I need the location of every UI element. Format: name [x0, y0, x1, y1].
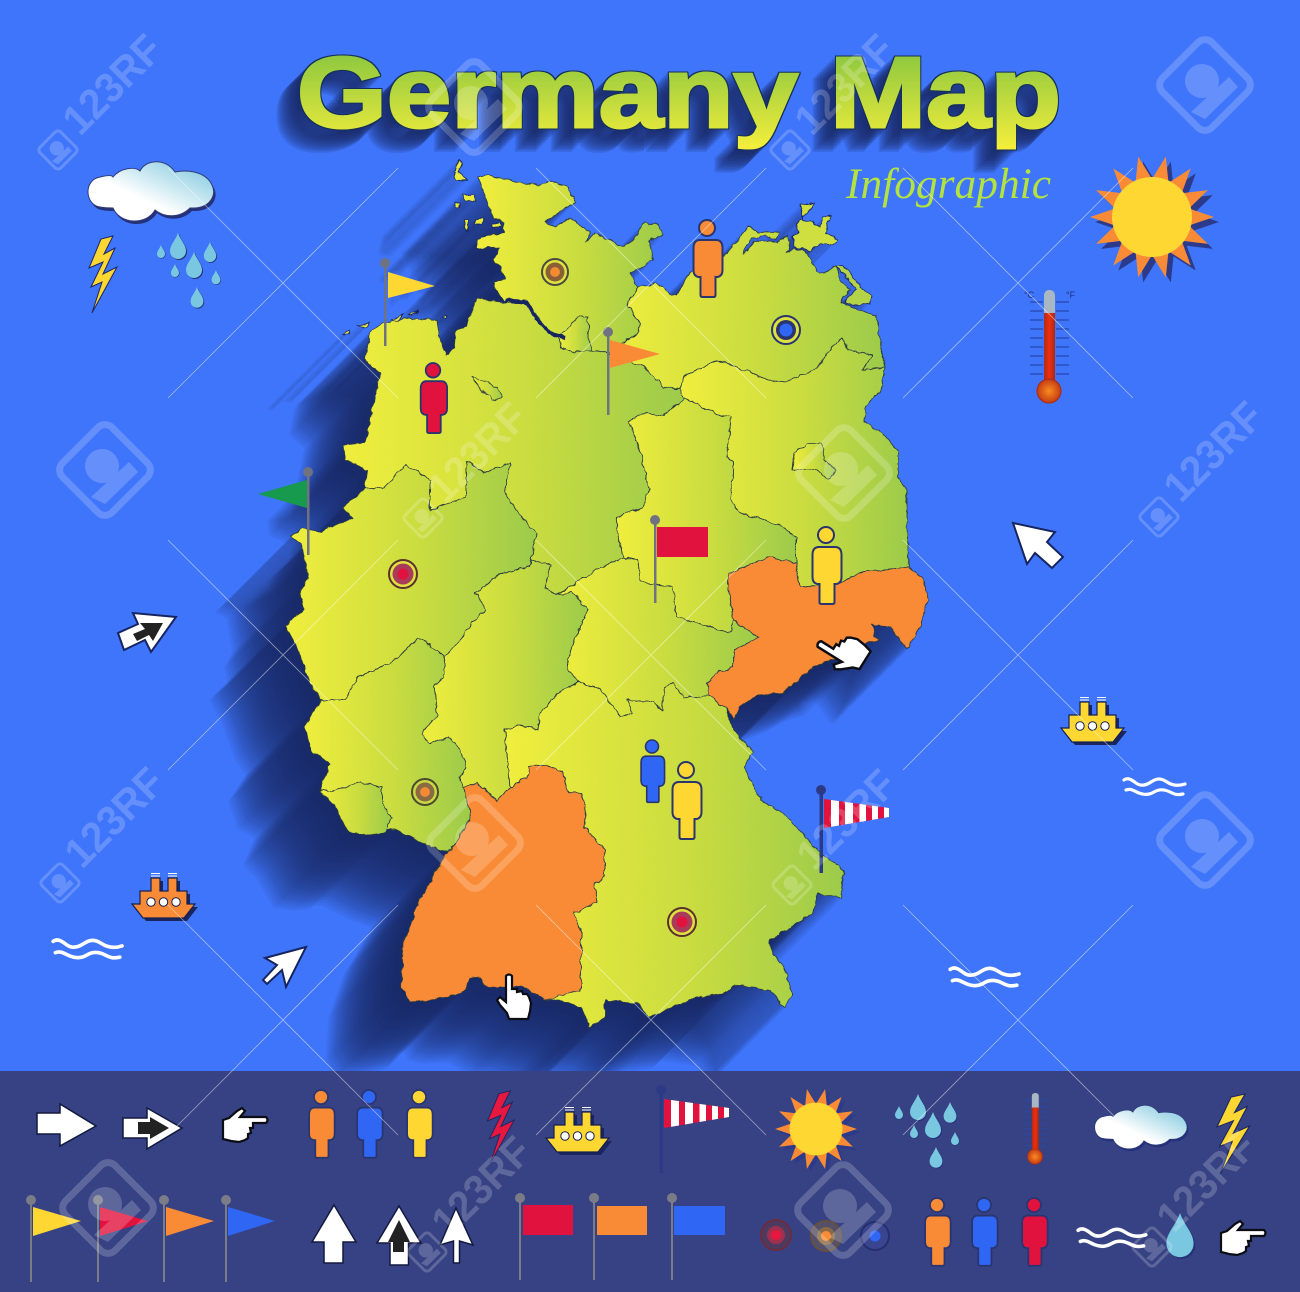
- islands: [342, 160, 872, 335]
- thermometer: °C: [1024, 290, 1035, 300]
- person: blue in Bavaria: [641, 740, 665, 802]
- person: orange: [694, 220, 722, 297]
- flag: orange pennant: [603, 327, 660, 415]
- watermark: 123RF: [53, 25, 171, 143]
- waves: [1078, 1229, 1146, 1247]
- target: red: [761, 1220, 791, 1250]
- person: yellow: [407, 1090, 433, 1158]
- watermark: 123RF: [787, 760, 905, 878]
- person: red: [421, 363, 447, 433]
- flag: yellow pennant: [26, 1195, 81, 1282]
- person: orange: [925, 1198, 951, 1266]
- target: Rhineland-Palatinate: [412, 779, 438, 805]
- state: Schleswig-Holstein: [477, 175, 664, 353]
- state: North Rhine-Westphalia: [285, 460, 536, 700]
- flag: green pennant: [258, 467, 313, 555]
- target: Bavaria: [668, 908, 696, 936]
- lightning: yellow: [1217, 1094, 1250, 1173]
- flag: red rectangle: [515, 1193, 573, 1280]
- subtitle: Infographic: [845, 161, 1051, 208]
- island: Usedom: [837, 265, 872, 306]
- flag: red pennant: [93, 1195, 148, 1282]
- arrow cursor: lower left: [263, 947, 306, 987]
- panel: icon legend: [0, 1071, 1300, 1292]
- watermark: 123RF: [1154, 392, 1272, 510]
- target: blue: [861, 1222, 889, 1250]
- state: Bavaria: [505, 682, 844, 1028]
- thermometer: [1023, 1093, 1048, 1164]
- target: Schleswig-Holstein: [542, 259, 568, 285]
- arrow: thin up: [440, 1208, 473, 1263]
- hand pointing right: [223, 1108, 268, 1142]
- flag: orange rectangle: [589, 1193, 647, 1280]
- state: Bremen: [471, 377, 503, 400]
- state: Mecklenburg-Vorpommern: [607, 227, 885, 390]
- watermark hairlines: [168, 168, 1133, 1135]
- thermometer: °F: [1066, 290, 1076, 300]
- target: North Rhine-Westphalia: [389, 560, 417, 588]
- person: blue: [357, 1090, 383, 1158]
- state: Rhineland-Palatinate: [304, 638, 471, 852]
- target: orange: [811, 1221, 841, 1251]
- watermark: 123RF: [422, 1127, 540, 1245]
- target: Mecklenburg-Vorpommern: [772, 316, 800, 344]
- Elbe river: [505, 300, 566, 338]
- title: Germany Map: [297, 37, 1061, 149]
- windsock on map: [816, 785, 889, 873]
- arrow: right with black core: [123, 1108, 182, 1149]
- island: Ruegen: [792, 203, 837, 252]
- map of Germany: [285, 160, 928, 1028]
- hand pointing right: [1221, 1221, 1266, 1255]
- flag: yellow pennant: [380, 258, 435, 346]
- person: red: [1022, 1198, 1048, 1266]
- flag: orange pennant: [159, 1195, 214, 1282]
- water drop: [1166, 1213, 1195, 1259]
- hand cursor: Saxony: [811, 623, 872, 680]
- weather: lightning: [89, 236, 117, 313]
- state: Saxony-Anhalt: [616, 398, 796, 633]
- lightning: red: [487, 1091, 514, 1163]
- rain drops: [895, 1094, 960, 1169]
- person: yellow in Bavaria: [672, 762, 702, 839]
- state: Hamburg: [558, 317, 592, 352]
- ship: yellow: [546, 1108, 612, 1155]
- watermark: 123RF: [1147, 1122, 1265, 1240]
- states: [285, 160, 928, 1028]
- flag: blue rectangle: [667, 1193, 725, 1280]
- person: orange: [309, 1090, 335, 1158]
- state: Baden-Wuerttemberg (highlighted): [401, 765, 605, 1002]
- arrow: white right: [37, 1104, 96, 1146]
- waves: lower left: [53, 940, 122, 958]
- sun: [775, 1089, 860, 1172]
- flag: blue pennant: [221, 1195, 275, 1282]
- weather: cloud: [88, 162, 216, 224]
- state: Hesse: [421, 560, 588, 800]
- cloud: [1095, 1105, 1188, 1151]
- state: Saarland: [319, 782, 391, 835]
- watermark: 123RF: [785, 25, 903, 143]
- weather: sun: [1090, 157, 1219, 282]
- windsock: [656, 1085, 729, 1173]
- state: Saxony (highlighted): [707, 557, 928, 720]
- state: Thuringia: [557, 558, 759, 717]
- arrow: up with black core: [377, 1206, 421, 1265]
- thermometer: [1024, 290, 1076, 403]
- waves: lower centre: [950, 968, 1019, 986]
- weather: rain drops: [157, 233, 221, 309]
- ship: orange: [132, 874, 198, 921]
- arrow cursor: upper right: [1013, 523, 1063, 568]
- person: blue: [972, 1198, 998, 1266]
- arrow cursor: left with black core: [118, 613, 176, 652]
- watermark: 123RF: [418, 393, 536, 511]
- hand cursor: Baden-Wuerttemberg: [497, 974, 531, 1019]
- ship: yellow: [1061, 698, 1127, 745]
- flag: red rectangle: [650, 515, 708, 603]
- person: yellow in Brandenburg: [812, 527, 842, 604]
- map markers: [258, 220, 889, 1019]
- state: Brandenburg: [679, 338, 909, 587]
- watermark: 123RF: [55, 758, 173, 876]
- state: Lower Saxony: [343, 298, 685, 595]
- panel background: [0, 1071, 1300, 1292]
- state: Berlin: [792, 443, 835, 480]
- arrow: white up: [312, 1205, 356, 1263]
- map long shadow: [285, 160, 928, 1028]
- waves: right: [1124, 779, 1185, 795]
